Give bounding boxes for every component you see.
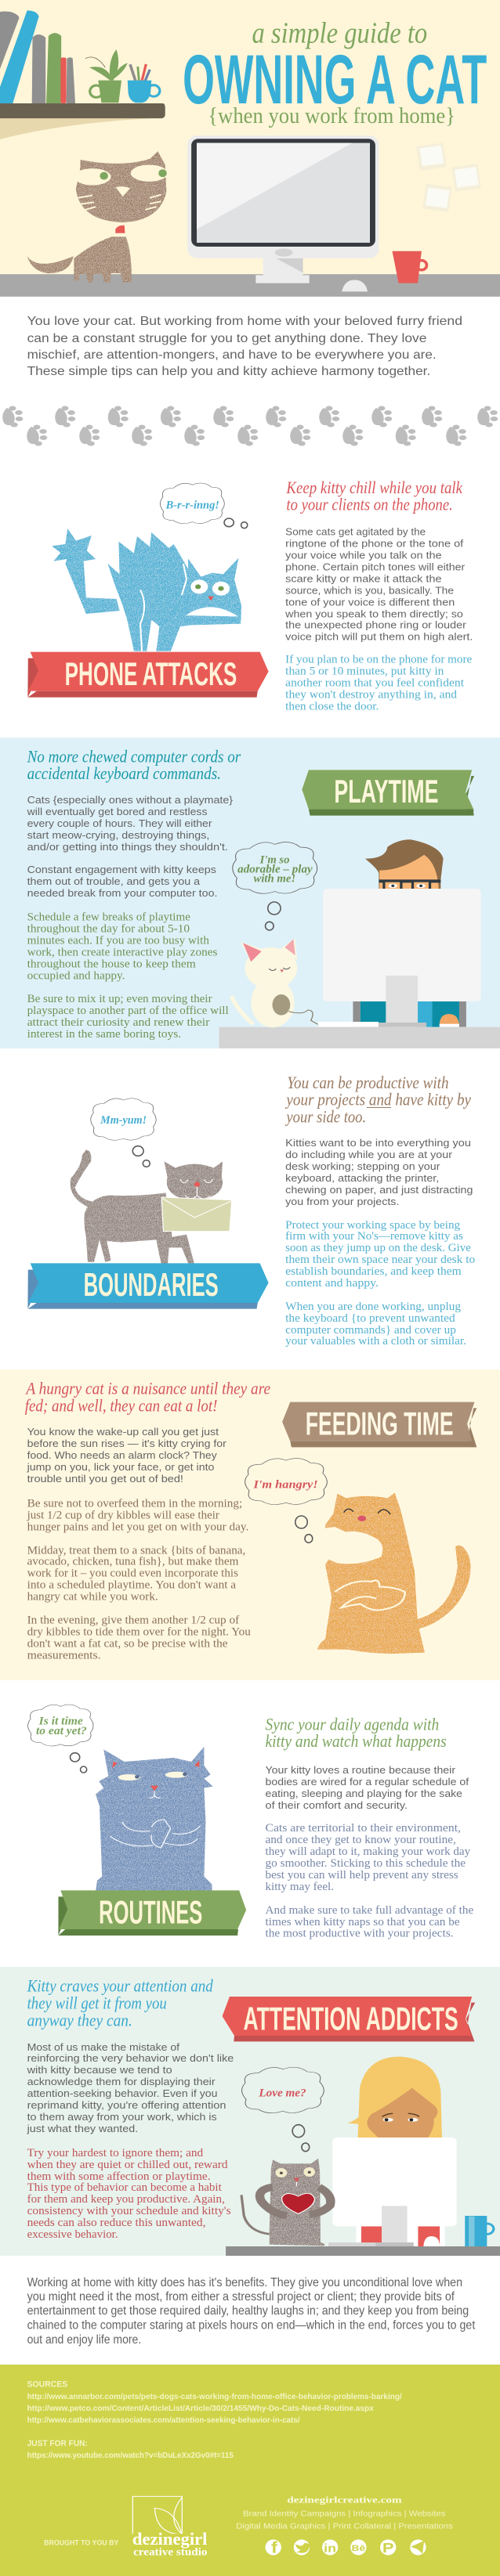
icon: brown cat [27, 151, 168, 283]
icon: blue-gray cat [96, 1747, 213, 1891]
tip text: soon as they jump up on the desk. Give [285, 1242, 471, 1254]
body text [27, 2042, 234, 2135]
body text: bodies are wired for a regular schedule of [266, 1777, 469, 1788]
body text: Cats {especially ones without a playmate} [27, 795, 233, 806]
tip text: they will adapt to it, making your work day [266, 1845, 470, 1858]
body text: just what they wanted. [27, 2123, 138, 2135]
tip text: measurements. [27, 1650, 101, 1661]
thought bubble: Mm-yum [91, 1099, 156, 1167]
tip text: interest in the same boring toys. [27, 1028, 181, 1041]
closing text [27, 2275, 475, 2347]
tip text: for them and keep you productive. Again, [27, 2193, 225, 2206]
social icons: f [271, 2539, 278, 2556]
tip text: work for it – you could even incorporate this [27, 1568, 238, 1579]
heading: A hungry cat is a nuisance until they are [25, 1380, 270, 1398]
tip text: times when kitty naps so that you can be [266, 1916, 460, 1928]
tip text: minutes each. If you are too busy with [27, 935, 209, 947]
body text: tone of your voice is different then [285, 597, 455, 608]
brought to you by: BROUGHT TO YOU BY [44, 2539, 118, 2547]
tip text: This type of behavior can become a habit [27, 2181, 222, 2194]
illustration: woman behind monitor [328, 2057, 457, 2246]
tip text: kitty may feel. [266, 1881, 334, 1893]
tip text: Be sure not to overfeed them in the morning; [27, 1498, 242, 1510]
body text: scare kitty or make it attack the [285, 574, 442, 585]
body text [27, 795, 233, 830]
body text: reprimand kitty, you're offering attention [27, 2100, 226, 2112]
panel: attention addicts [0, 1967, 500, 2256]
thought bubble: B-r-r-inng: B-r-r-inng! [165, 498, 219, 511]
intro text: can be a constant struggle for you to get anything done. They love [27, 331, 427, 345]
heading [284, 1073, 471, 1127]
heading: fed; and well, they can eat a lot! [25, 1397, 218, 1416]
tip text: Cats are territorial to their environment, [266, 1822, 461, 1835]
body text: Some cats get agitated by the [285, 527, 426, 538]
body text: phone. Certain pitch tones will either [285, 562, 465, 573]
icon: orange cat [317, 1493, 470, 1654]
thought bubble: I'm so adorable: adorable – play [237, 862, 313, 875]
heading [266, 1716, 447, 1751]
heading: your side too. [284, 1108, 366, 1127]
sources: http://www.petco.com/Content/ArticleList/Article/30/2/1455/Why-Do-Cats-Need-Routine.aspx [27, 2405, 375, 2413]
thought bubble: I'm hangry [245, 1459, 327, 1542]
heading [286, 478, 463, 514]
heading [25, 1380, 270, 1416]
body text: you from your projects. [285, 1196, 399, 1208]
body text continued: Constant engagement with kitty keeps [27, 864, 216, 876]
thought bubble: B-r-r-inng [160, 483, 248, 529]
tip text: attract their curiosity and renew their [27, 1016, 210, 1029]
thought bubble: I'm hangry: I'm hangry! [252, 1477, 318, 1491]
panel: feeding time [0, 1369, 500, 1680]
tip text: Try your hardest to ignore them; and [27, 2147, 203, 2159]
body text: chewing on paper, and just distracting [285, 1185, 473, 1196]
tip text: Midday, treat them to a snack {bits of banana, [27, 1545, 245, 1557]
icon: desktop monitor [187, 135, 379, 283]
social icons: Bē [352, 2543, 365, 2553]
thought bubble: Love me [242, 2067, 324, 2152]
sources: http://www.catbehaviorassociates.com/attention-seeking-behavior-in-cats/ [27, 2416, 299, 2425]
tip text: If you plan to be on the phone for more [285, 654, 472, 666]
panel: footer [0, 2365, 500, 2576]
thought bubble: Mm-yum: Mm-yum! [100, 1113, 147, 1127]
tip text: them their own space near your desk to [285, 1254, 475, 1266]
thought bubble: I'm so adorable: with me! [253, 871, 295, 885]
contact details: Brand Identity Campaigns | Infographics | Websites [243, 2510, 446, 2518]
tip text: Protect your working space by being [285, 1219, 460, 1232]
tip text: just 1/2 cup of dry kibbles will ease their [27, 1510, 220, 1521]
heading: No more chewed computer cords or [27, 748, 241, 767]
tip text: throughout the house to keep them [27, 958, 196, 970]
logo: dezinegirl creative studio [131, 2496, 209, 2558]
body text: You know the wake-up call you get just [27, 1427, 219, 1438]
tip text: don't want a fat cat, so be precise with the [27, 1638, 228, 1650]
body text continued: them out of trouble, and gets you a [27, 876, 201, 888]
title: a simple guide to [252, 16, 427, 49]
tip text: establish boundaries, and keep them [285, 1265, 462, 1278]
logo: dezinegirl creative studio: creative studio [133, 2546, 208, 2558]
desk [219, 1027, 500, 1048]
body text: ringtone of the phone or the tone of [285, 539, 464, 550]
heading [27, 1977, 213, 2030]
body text: reinforcing the very behavior we don't like [27, 2053, 234, 2065]
sources [27, 2379, 402, 2460]
tip text: when they are quiet or chilled out, reward [27, 2159, 228, 2171]
panel: playtime [0, 738, 500, 1048]
tip text: them with some affection or playtime. [27, 2170, 211, 2183]
body text: the unexpected phone ring or louder [285, 620, 466, 631]
tip text [27, 2147, 231, 2241]
body text: when you speak to them directly; so [284, 609, 463, 620]
tip text [285, 654, 472, 713]
body text: do including while you are at your [285, 1149, 452, 1161]
ribbon: boundaries [27, 1263, 269, 1309]
panel: header illustration and title [0, 0, 500, 297]
icon: scared blue cat [52, 529, 241, 651]
logo: dezinegirl creative studio: dezinegirl [132, 2530, 208, 2549]
heading [27, 748, 241, 783]
tip text: the most productive with your projects. [266, 1928, 454, 1939]
icon: gray cat holding heart [241, 2159, 331, 2246]
body text continued: and/or getting into things they shouldn't. [27, 842, 228, 853]
ribbon: phone attacks [27, 652, 269, 698]
body text: will eventually get bored and restless [27, 806, 207, 818]
tip text: throughout the day for about 5-10 [27, 923, 190, 935]
icon: potted plant [85, 49, 128, 103]
icon: mouse [342, 280, 368, 291]
sources: JUST FOR FUN: [27, 2438, 88, 2448]
tip text [285, 1219, 475, 1348]
body text: with kitty because we tend to [27, 2065, 172, 2076]
sources: SOURCES [27, 2379, 67, 2389]
body text continued [27, 830, 228, 900]
heading: anyway they can. [27, 2011, 132, 2030]
contact details: dezinegirlcreative.com [287, 2495, 402, 2505]
panel: boundaries [27, 1073, 475, 1348]
thought bubble: Is it time to eat yet: to eat yet? [36, 1724, 87, 1737]
body text: before the sun rises — it's kitty crying for [27, 1438, 226, 1450]
tip text [266, 1822, 473, 1939]
sources: https://www.youtube.com/watch?v=bDuLeXx2Gv0#t=115 [27, 2452, 234, 2460]
desk [226, 2246, 500, 2256]
contact details [236, 2495, 453, 2531]
body text: eating, sleeping and playing for the sake [266, 1788, 462, 1800]
body text continued: needed break from your computer too. [27, 888, 218, 900]
tip text: computer commands} and cover up [285, 1324, 456, 1337]
tip text [27, 1498, 251, 1661]
body text: keyboard, attacking the printer, [285, 1173, 439, 1185]
illustration: man behind monitor [318, 839, 481, 1027]
tip text: firm with your No's—remove kitty as [285, 1230, 463, 1243]
body text: your voice while you talk on the [285, 550, 442, 561]
contact details: Digital Media Graphics | Print Collateral | Presentations [236, 2523, 453, 2531]
tip text: work, then create interactive play zones [27, 947, 218, 958]
social icons [266, 2539, 426, 2556]
thought bubble: Is it time to eat yet [28, 1705, 93, 1773]
panel: routines [28, 1705, 473, 1939]
social icons: P [382, 2541, 394, 2556]
tip text: Be sure to mix it up; even moving their [27, 993, 212, 1005]
tip text: into a scheduled playtime. You don't want a [27, 1579, 236, 1591]
tip text: needs can also reduce this unwanted, [27, 2217, 205, 2229]
tip text: content and happy. [285, 1277, 379, 1290]
tip text: In the evening, give them another 1/2 cup of [27, 1615, 240, 1626]
ribbon: playtime [302, 770, 474, 816]
intro text: mischief, are attention-mongers, and have to be everywhere you are. [27, 348, 437, 362]
thought bubble: Is it time to eat yet: Is it time [38, 1714, 83, 1727]
social icons: in [324, 2542, 336, 2555]
body text: of their comfort and security. [266, 1800, 408, 1812]
sources: http://www.annarbor.com/pets/pets-dogs-cats-working-from-home-office-behavior-problems-barking/ [27, 2393, 402, 2401]
body text: jump on you, lick your face, or get into [27, 1462, 214, 1474]
tip text: the keyboard {to prevent unwanted [285, 1312, 455, 1325]
panel: phone attacks [27, 478, 473, 713]
tip text: hunger pains and let you get on with your day. [27, 1521, 248, 1533]
title: {when you work from home} [208, 104, 455, 128]
tip text: Schedule a few breaks of playtime [27, 911, 190, 923]
tip text: and once they get to know your routine, [266, 1834, 456, 1846]
title [183, 16, 487, 128]
body text: voice pitch will put them on high alert. [285, 632, 473, 643]
closing text: out and enjoy life more. [27, 2332, 141, 2347]
tip text [27, 911, 229, 1041]
ribbon: routines: ROUTINES [99, 1894, 202, 1931]
body text: to them away from your work, which is [27, 2112, 217, 2123]
tip text: your valuables with a cloth or similar. [285, 1335, 466, 1348]
tip text: best you can will help prevent any stress [266, 1869, 458, 1881]
body text: every couple of hours. They will either [27, 818, 212, 830]
tip text: hangry cat while you work. [27, 1591, 158, 1603]
body text: source, which is you, basically. The [285, 586, 454, 597]
ribbon: routines [58, 1890, 246, 1936]
icon: bookshelf with books [0, 10, 165, 141]
desk [0, 274, 500, 297]
icon: sticky notes [416, 143, 481, 212]
intro text: You love your cat. But working from home with your beloved furry friend [27, 314, 462, 328]
intro text: These simple tips can help you and kitty achieve harmony together. [27, 364, 430, 378]
body text [266, 1765, 469, 1812]
body text [27, 1427, 226, 1485]
tip text: then close the door. [285, 701, 379, 713]
intro text [27, 314, 462, 378]
ribbon: phone attacks: PHONE ATTACKS [65, 655, 237, 692]
tip text: consistency with your schedule and kitty's [27, 2205, 231, 2217]
body text: Your kitty loves a routine because their [266, 1765, 455, 1777]
tip text: another room that you feel confident [285, 677, 465, 689]
body text [285, 1138, 473, 1208]
body text [284, 527, 473, 643]
body text: trouble until you get out of bed! [27, 1474, 183, 1485]
thought bubble: I'm so adorable: I'm so [259, 853, 289, 866]
icon: gray cat with envelope [71, 1149, 232, 1267]
body text: Most of us make the mistake of [27, 2042, 180, 2054]
tip text: they won't destroy anything in, and [285, 689, 457, 701]
thought bubble: Love me: Love me? [258, 2086, 306, 2099]
tip text: dry kibbles to tide them over for the night. You [27, 1626, 251, 1638]
tip text: occupied and happy. [27, 970, 125, 982]
paw print divider [2, 406, 498, 446]
body text: food. Who needs an alarm clock? They [27, 1450, 217, 1462]
icon: red mug [392, 251, 426, 283]
body text: desk working; stepping on your [285, 1161, 440, 1173]
illustration: cream kitten with yarn [232, 938, 318, 1027]
tip text: excessive behavior. [27, 2228, 118, 2241]
icon: pencil cup [128, 64, 160, 103]
heading: Kitty craves your attention and [27, 1977, 213, 1996]
heading: Sync your daily agenda with [266, 1716, 439, 1734]
tip text: go smoother. Sticking to this schedule the [266, 1857, 466, 1870]
tip text: playspace to another part of the office will [27, 1005, 229, 1017]
body text continued: start meow-crying, destroying things, [27, 830, 209, 842]
body text: attention-seeking behavior. Even if you [27, 2088, 218, 2100]
tip text: avocado, chicken, tuna fish}, but make them [27, 1556, 239, 1568]
ribbon: attention addicts [223, 1997, 475, 2041]
tip text: And make sure to take full advantage of the [266, 1904, 473, 1917]
tip text: than 5 or 10 minutes, put kitty in [285, 666, 444, 677]
tip text: When you are done working, unplug [285, 1301, 461, 1313]
heading: they will get it from you [27, 1994, 167, 2013]
thought bubble: I'm so adorable [233, 842, 317, 930]
ribbon: boundaries: BOUNDARIES [84, 1266, 219, 1303]
icon: blue mug [465, 2216, 494, 2246]
body text: Kitties want to be into everything you [285, 1138, 471, 1149]
heading: accidental keyboard commands. [27, 764, 221, 783]
body text: acknowledge them for displaying their [27, 2076, 216, 2088]
ribbon: feeding time [282, 1402, 476, 1447]
